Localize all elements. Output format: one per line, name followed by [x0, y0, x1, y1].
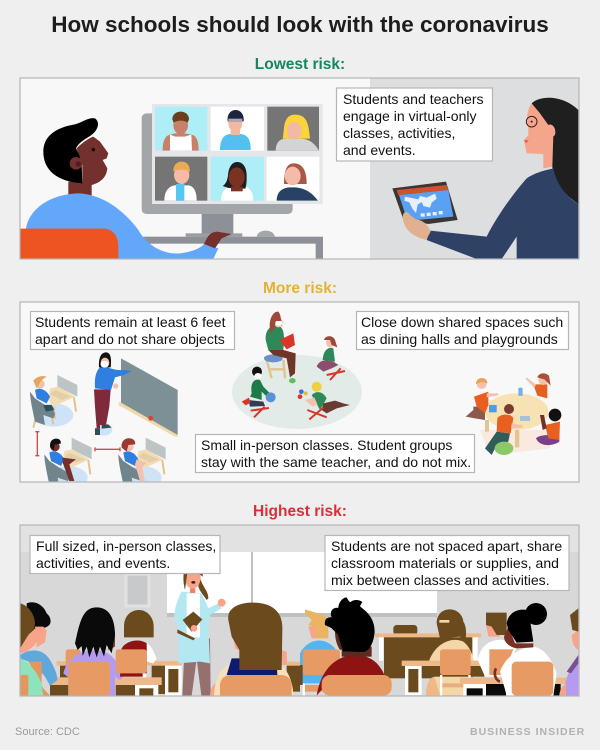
children around table	[466, 373, 561, 455]
child with ball	[242, 367, 276, 417]
teacher on stool with book	[264, 312, 296, 383]
text box: small classes	[196, 434, 474, 472]
student: pigtails, cream top	[426, 609, 473, 696]
text box: virtual-only: and events.	[343, 142, 416, 158]
brand: business insider: BUSINESS INSIDER	[470, 726, 585, 738]
panel: lowest risk	[20, 78, 579, 259]
heading: highest risk: Highest risk:	[253, 503, 347, 520]
text box: not spaced apart: classroom materials or supplies, and	[331, 555, 559, 571]
rug	[232, 355, 362, 429]
desk rows, left	[50, 661, 182, 696]
text box: six feet	[30, 312, 234, 350]
right half of classroom	[300, 597, 578, 696]
source: Source: CDC	[15, 726, 80, 738]
student: black curly hair, blue top	[20, 602, 57, 686]
student viewed from behind	[20, 118, 232, 259]
student: brown hair, green top (far left)	[20, 603, 50, 696]
heading: more risk: More risk:	[263, 280, 337, 297]
text box: six feet: Students remain at least 6 feet	[35, 314, 226, 330]
text box: full sized: Full sized, in-person classes,	[36, 538, 216, 554]
student: spiky black hair, red top	[317, 597, 392, 696]
panel: highest risk	[20, 525, 579, 696]
video call participants	[163, 110, 319, 201]
left half of classroom	[20, 563, 300, 696]
student: blond hair, blue top	[300, 609, 340, 696]
text box: small classes: stay with the same teacher, and do not mix.	[201, 454, 471, 470]
student at desk, top left	[30, 375, 77, 428]
student: short brown hair, white top	[478, 613, 517, 677]
text box: shared spaces: Close down shared spaces such	[361, 314, 563, 330]
text box: full sized	[30, 536, 220, 574]
text box: shared spaces	[356, 312, 568, 350]
text box: virtual-only: Students and teachers	[343, 91, 484, 107]
monitor	[142, 104, 323, 259]
text box: virtual-only: classes, activities,	[343, 125, 455, 141]
student: bob hair, red vest	[116, 610, 157, 677]
title: How schools should look with the coronavirus	[51, 12, 549, 37]
text box: not spaced apart: Students are not spaced apart, share	[331, 538, 562, 554]
teacher standing	[174, 563, 226, 696]
student at desk, bottom centre-left	[44, 438, 92, 482]
teacher with tablet	[392, 98, 578, 259]
student: right edge, purple top	[559, 608, 578, 696]
text box: not spaced apart: mix between classes and activities.	[331, 572, 550, 588]
text box: virtual-only: engage in virtual-only	[343, 108, 477, 124]
text box: shared spaces: as dining halls and playgrounds	[361, 331, 558, 347]
student: long brown hair	[210, 603, 300, 696]
whiteboard	[126, 552, 437, 617]
student: braids, purple top	[63, 607, 125, 696]
text box: virtual-only	[336, 88, 492, 161]
child kneeling, top right of rug	[317, 336, 345, 380]
teacher's desk	[375, 625, 481, 678]
text box: small classes: Small in-person classes. Student groups	[201, 437, 452, 453]
text box: six feet: apart and do not share objects	[35, 331, 225, 347]
text box: full sized: activities, and events.	[36, 555, 170, 571]
distance markers	[35, 432, 120, 456]
text box: not spaced apart	[325, 536, 569, 590]
panel: more risk	[20, 302, 579, 489]
student: hair bun, white top	[460, 603, 567, 696]
heading: lowest risk: Lowest risk:	[255, 56, 345, 73]
chalkboard	[118, 358, 178, 437]
desk, middle right	[402, 649, 484, 696]
child lying down with toys	[298, 382, 350, 419]
student at desk, bottom centre-right	[118, 438, 166, 482]
classroom teacher	[94, 352, 132, 436]
